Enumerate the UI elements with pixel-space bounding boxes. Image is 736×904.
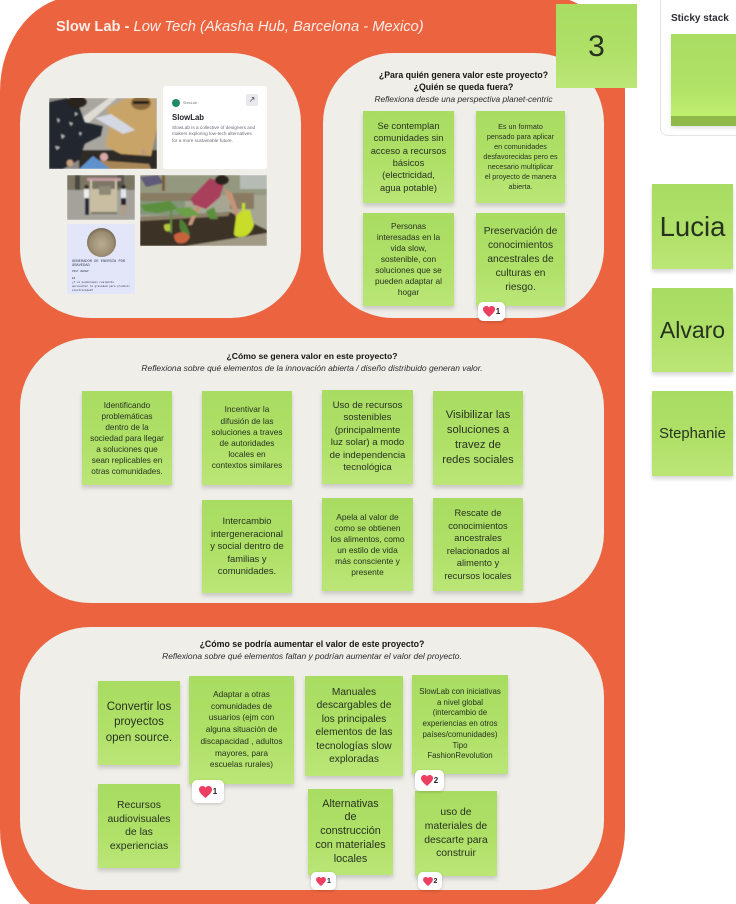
- reaction: heart 1: 1: [496, 307, 500, 316]
- sticky note: Manuales: [332, 686, 376, 698]
- sticky note: [322, 390, 413, 484]
- sticky note: [363, 111, 454, 203]
- heading: cómo aumentar: [162, 639, 462, 661]
- sticky note: difusión de las: [220, 416, 274, 426]
- sticky note: conocimientos: [488, 240, 553, 250]
- sticky note: sostenible, con: [381, 254, 436, 264]
- icon: logo: [172, 99, 180, 107]
- sticky note: materiales de: [425, 821, 487, 832]
- sticky note: construcción: [320, 825, 381, 837]
- sticky note: riesgo.: [505, 282, 536, 292]
- sticky note: con materiales: [315, 839, 386, 851]
- sticky note: básicos: [393, 158, 424, 168]
- sticky note: descarte para: [424, 834, 488, 846]
- article text: ES: [72, 277, 75, 280]
- article text: ¿Y si pudiéramos realmente: [72, 281, 114, 284]
- sticky note: [82, 391, 172, 485]
- heading: cómo aumentar: ¿Cómo se podría aumentar el valor de este proyecto?: [200, 639, 424, 649]
- sticky note: pensado para aplicar: [487, 132, 554, 141]
- sticky note: tecnológica: [343, 462, 392, 473]
- card description: makers exploring low-tech alternatives: [172, 131, 252, 136]
- sticky note: comunidades.: [218, 565, 276, 576]
- reaction: heart 2: [418, 872, 442, 890]
- heading: cómo aumentar: Reflexiona sobre qué elementos faltan y podrían aumentar el valor del proyecto.: [162, 651, 462, 661]
- sticky note: Lucia: [652, 184, 733, 269]
- panel: cómo aumentar el valor: [20, 627, 604, 890]
- sticky note: Alvaro: [652, 288, 733, 372]
- sticky note: dentro de la: [105, 422, 149, 432]
- sticky note: comunidades de: [211, 701, 272, 711]
- sticky note: Lucia: Lucia: [660, 210, 725, 242]
- sticky note: [415, 791, 497, 876]
- sticky note: los alimentos, como: [330, 534, 404, 544]
- sticky note: agua potable): [380, 183, 437, 193]
- sticky note: sean replicables en: [92, 456, 162, 464]
- card description: for a more sustainable future.: [172, 138, 233, 143]
- sticky note: Personas: [391, 221, 426, 231]
- sticky note: a soluciones que: [96, 444, 158, 454]
- heading: para quién: Reflexiona desde una perspectiva planet-centric: [374, 94, 553, 104]
- sticky note: sostenibles: [343, 412, 391, 423]
- sticky note: FashionRevolution: [427, 751, 493, 760]
- reaction: heart 1: 1: [213, 787, 217, 796]
- panel: project images: [20, 53, 301, 318]
- sticky note: a nivel global: [437, 698, 483, 707]
- sticky note: usuarios (ejm con: [209, 712, 274, 722]
- sticky note: culturas en: [496, 268, 545, 278]
- sticky note: experiencias en otros: [422, 719, 498, 728]
- sticky note: Es un formato: [498, 122, 543, 131]
- reaction: heart 1: [478, 302, 505, 321]
- sticky note: el proyecto de manera: [485, 172, 556, 181]
- sticky note: ancestrales: [454, 533, 502, 543]
- card description: [172, 125, 255, 143]
- heading: cómo se genera: ¿Cómo se genera valor en este proyecto?: [226, 351, 397, 361]
- sticky note: intergeneracional: [211, 528, 283, 539]
- sticky note: [476, 111, 565, 203]
- sticky note: [433, 391, 523, 485]
- sticky note: tecnologías slow: [316, 740, 392, 752]
- reaction: heart 1: 1: [327, 878, 331, 884]
- sticky stack label: Sticky stack: [671, 13, 729, 24]
- sticky note: discapacidad , adultos: [200, 736, 283, 746]
- pad edge: [671, 116, 736, 126]
- article text: [72, 259, 130, 292]
- sticky note: luz solar) a modo: [331, 437, 404, 448]
- sticky note: exploradas: [329, 754, 379, 765]
- article text: PSST AHORA!: [72, 270, 90, 273]
- sticky note: Preservación de: [484, 226, 557, 236]
- sticky stack pad: [671, 34, 736, 126]
- reaction: heart 2: [415, 770, 444, 791]
- card: SlowLab link preview: [163, 86, 267, 169]
- sticky note: [98, 681, 180, 765]
- sticky note: descargables de: [317, 700, 391, 711]
- card description: SlowLab is a collective of designers and: [172, 125, 255, 130]
- sticky note: experiencias: [110, 840, 168, 852]
- heading: para quién: ¿Quién se queda fuera?: [414, 82, 513, 92]
- sticky note: presente: [351, 566, 384, 576]
- sticky note: otras comunidades.: [91, 466, 163, 476]
- photo: person planting in raised bed: [140, 175, 267, 246]
- sticky note: [305, 676, 403, 776]
- sticky note: hogar: [398, 287, 419, 297]
- sticky note: escuelas rurales): [210, 759, 273, 769]
- icon: open link: ↗: [249, 95, 255, 104]
- sticky note: los principales: [322, 714, 386, 724]
- sticky note: conocimientos: [448, 520, 508, 530]
- reaction: heart 1: [311, 872, 336, 890]
- sticky note: Stephanie: Stephanie: [659, 426, 726, 442]
- sticky note: como se obtienen: [334, 522, 401, 532]
- sticky note: comunidades sin: [374, 133, 443, 143]
- sticky note: (electricidad,: [382, 170, 435, 180]
- sticky note: open source.: [106, 732, 172, 744]
- sticky note: desfavorecidas pero es: [483, 152, 558, 161]
- sticky note: Rescate de: [454, 508, 502, 518]
- sticky note: acceso a recursos: [371, 146, 446, 156]
- article text: aprovechar la gravedad para producir: [72, 285, 130, 288]
- sticky note: de las: [125, 827, 153, 838]
- sticky note: Adaptar a otras: [213, 689, 270, 699]
- sticky note: abierta.: [508, 182, 532, 191]
- card title: SlowLab: [172, 113, 204, 122]
- sticky note: Convertir los: [107, 701, 171, 713]
- sticky note: SlowLab con iniciativas: [419, 687, 501, 696]
- sticky note: Intercambio: [222, 515, 271, 526]
- sticky note: soluciones a: [447, 424, 509, 436]
- sticky note: Apela al valor de: [336, 512, 399, 522]
- card: gravity energy article: [67, 224, 135, 294]
- title: Slow Lab - Low Tech (Akasha Hub, Barcelona - Mexico): [56, 19, 424, 35]
- sticky note: más consciente y: [335, 556, 400, 566]
- reaction: heart 2: 2: [434, 878, 437, 884]
- reaction: heart 1: [192, 780, 224, 803]
- sticky note: Recursos: [117, 800, 161, 811]
- sticky note: [476, 213, 565, 306]
- sticky note: recursos locales: [444, 570, 512, 580]
- article text: GENERADOR DE ENERGÍA POR: [72, 260, 125, 264]
- sticky note: países/comunidades): [422, 730, 498, 739]
- sticky note: problemáticas: [102, 412, 152, 420]
- sticky note: Uso de recursos: [333, 400, 402, 410]
- sticky note: elementos de las: [315, 727, 393, 738]
- sticky note: necesario multiplicar: [488, 162, 553, 171]
- article text: electricidad?: [72, 289, 93, 292]
- sticky note: Incentivar la: [225, 404, 269, 414]
- sticky note: de: [344, 811, 356, 823]
- sticky note: soluciones a traves: [211, 427, 283, 437]
- sticky note: number 3: [556, 4, 637, 88]
- reaction: heart 2: 2: [434, 776, 438, 785]
- sticky note: en comunidades: [494, 142, 547, 151]
- sticky note: travez de: [455, 439, 501, 451]
- sticky note: mayores, para: [215, 748, 268, 758]
- sticky note: [412, 675, 508, 774]
- sticky note: Identificando: [104, 400, 150, 410]
- panel: sticky stack: [660, 0, 736, 136]
- sticky note: Tipo: [452, 741, 468, 750]
- heading: para quién: [374, 70, 553, 104]
- panel: cómo se genera valor: [20, 338, 604, 603]
- sticky note: (intercambio de: [433, 708, 487, 717]
- logo label: SlowLab: [183, 101, 197, 105]
- circular image: [87, 228, 116, 257]
- sticky note: uso de: [440, 807, 472, 818]
- sticky note: Alvaro: Alvaro: [660, 317, 725, 343]
- sticky note: de autoridades: [220, 438, 274, 448]
- photo: people with solar device: [49, 98, 157, 169]
- sticky note: [363, 213, 454, 306]
- heading: cómo se genera: Reflexiona sobre qué elementos de la innovación abierta / diseño distribuido generan valor.: [141, 363, 483, 373]
- heading: para quién: ¿Para quién genera valor este proyecto?: [379, 70, 548, 80]
- sticky note: alguna situación de: [206, 724, 277, 734]
- sticky note: un estilo de vida: [337, 544, 398, 554]
- sticky note: pueden adaptar al: [375, 276, 442, 286]
- photo: solar cart with kids: [67, 175, 135, 220]
- sticky note: [202, 500, 292, 593]
- sticky note: interesadas en la: [377, 232, 440, 242]
- sticky note: familias y: [227, 553, 267, 564]
- sticky note: [322, 498, 413, 591]
- sticky note: y social dentro de: [210, 540, 284, 551]
- sticky note: alimento y: [457, 558, 499, 568]
- sticky note: redes sociales: [442, 454, 514, 466]
- sticky note: [202, 391, 292, 485]
- sticky note: Stephanie: [652, 391, 733, 476]
- sticky note: Visibilizar las: [446, 409, 510, 421]
- sticky note: [98, 784, 180, 868]
- panel: para quién genera valor: [323, 53, 604, 318]
- sticky note: (principalmente: [335, 424, 400, 436]
- sticky note: number 3: 3: [588, 30, 605, 63]
- sticky note: contextos similares: [212, 460, 282, 470]
- sticky note: [189, 676, 294, 784]
- sticky note: audiovisuales: [108, 814, 170, 824]
- sticky note: relacionados al: [447, 546, 509, 556]
- sticky note: proyectos: [114, 716, 164, 728]
- sticky note: [433, 498, 523, 591]
- sticky note: soluciones que se: [375, 265, 442, 275]
- sticky note: Se contemplan: [377, 121, 440, 131]
- sticky note: ancestrales de: [487, 254, 554, 264]
- sticky note: locales: [334, 853, 367, 865]
- sticky note: Alternativas: [322, 798, 379, 810]
- sticky note: [308, 789, 393, 875]
- icon: open link: [246, 94, 258, 106]
- article text: GRAVEDAD: [72, 264, 90, 268]
- heading: cómo se genera: [141, 351, 483, 373]
- sticky note: construir: [436, 848, 476, 859]
- sticky note: locales en: [228, 449, 266, 459]
- sticky note: sociedad para llegar: [90, 434, 164, 442]
- sticky note: de independencia: [330, 450, 405, 460]
- sticky note: vida slow,: [390, 243, 426, 253]
